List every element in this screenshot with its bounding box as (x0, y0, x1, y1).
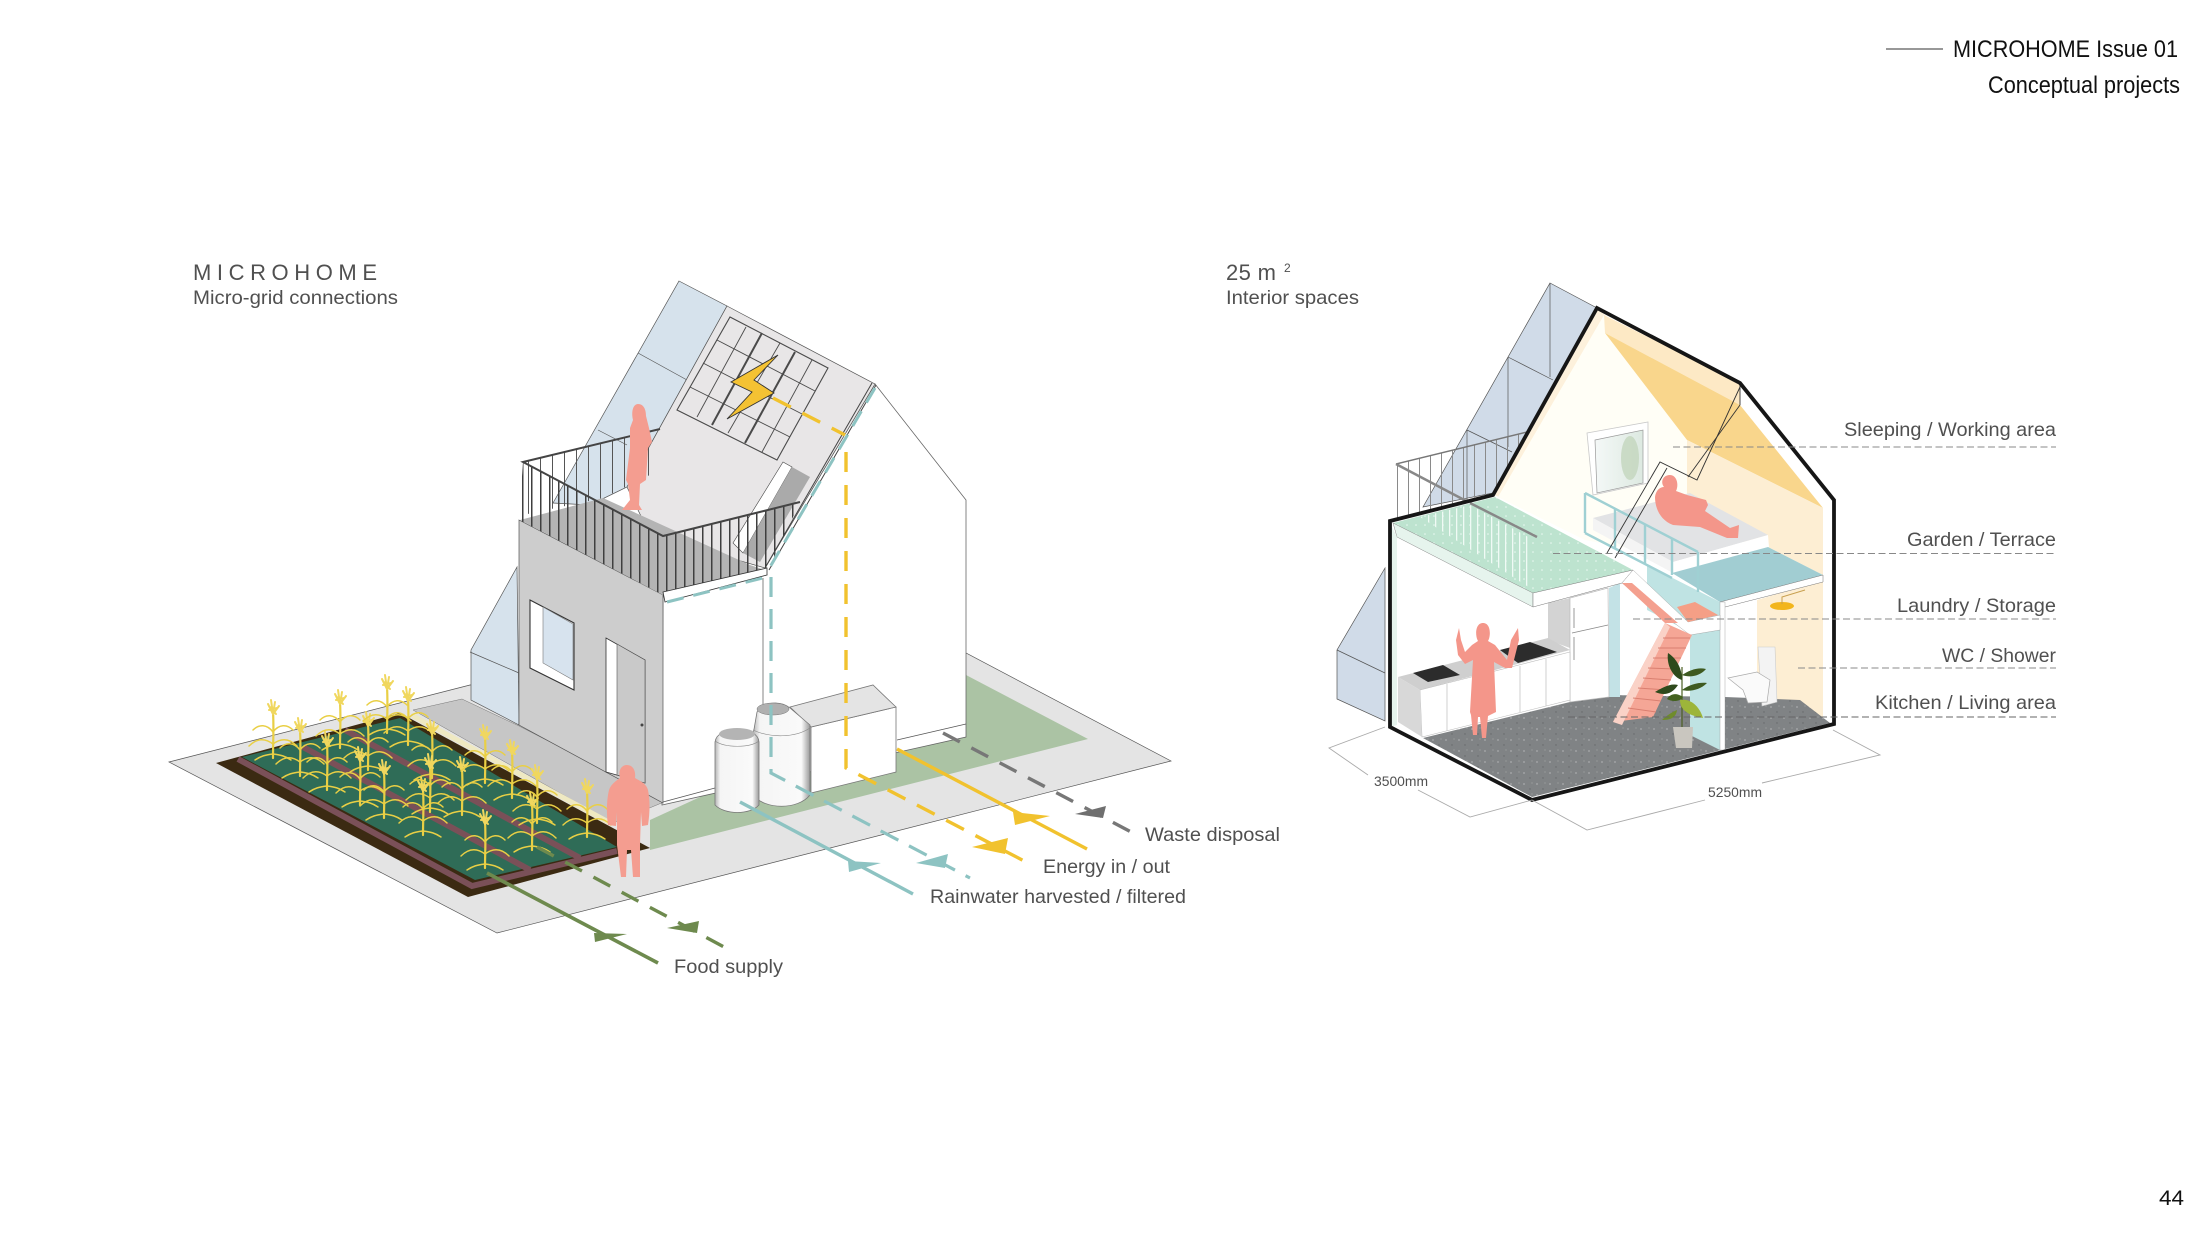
stoves (1413, 642, 1557, 682)
flow: energy in and out (773, 398, 1171, 878)
house gable wall (662, 384, 966, 805)
flow: energy in and out: Energy in / out (1043, 856, 1171, 878)
heading: 25 m2 (1226, 260, 1359, 309)
fridge (1570, 588, 1609, 702)
dimension: 5250mm: 5250mm (1708, 784, 1762, 800)
heading: 25 m2: 25 m (1226, 260, 1276, 285)
blue wall stripe (1609, 583, 1620, 697)
header: Conceptual projects (1988, 72, 2180, 99)
mezzanine edge (1720, 575, 1823, 607)
blue upper side panels (1423, 283, 1597, 507)
small rainwater tank (715, 728, 759, 812)
flow: food supply (487, 847, 783, 978)
callout: garden and terrace: Garden / Terrace (1907, 529, 2056, 551)
green strip (650, 675, 1088, 850)
kitchen counter (1398, 638, 1570, 737)
callout: kitchen and living area: Kitchen / Living area (1875, 692, 2056, 714)
icon: shower head (1770, 590, 1805, 610)
header (1886, 36, 2180, 99)
laundry platform (1677, 602, 1718, 622)
back wall (1498, 315, 1690, 560)
bed (1593, 493, 1769, 573)
ladder (1613, 583, 1692, 725)
page number: 44 (2159, 1187, 2184, 1210)
glass thin lines (1607, 383, 1740, 558)
dimension: 3500mm (1329, 727, 1532, 817)
garden beds (238, 716, 617, 886)
blue upper solar panel (553, 281, 727, 505)
flow: food supply: Food supply (674, 956, 783, 978)
terrace floor (520, 498, 765, 595)
front wall (519, 520, 663, 803)
kitchen grey wall (1548, 598, 1570, 648)
solar panel (677, 317, 828, 460)
floor (1423, 695, 1830, 797)
callout: sleeping and working area: Sleeping / Working area (1844, 419, 2056, 441)
corn plants (249, 675, 611, 870)
roof (627, 306, 875, 568)
wall: warm yellow upper (1687, 440, 1823, 575)
sloped roof: deep yellow (1605, 333, 1823, 508)
blue mezzanine floor (1672, 547, 1823, 602)
header: MICROHOME Issue 01 (1953, 36, 2178, 63)
stair slab (1622, 570, 1720, 635)
dimension: 3500mm: 3500mm (1374, 773, 1428, 789)
blue lower side panel (1337, 568, 1385, 721)
skylight (733, 462, 810, 562)
heading: 25 m2: 2 (1284, 261, 1291, 275)
flow: rainwater harvested and filtered: Rainwater harvested / filtered (930, 886, 1186, 908)
heading: microhome (193, 260, 398, 309)
roof edge strip (765, 383, 876, 570)
dimension: 5250mm (1532, 730, 1880, 830)
sloped roof: light yellow (1604, 315, 1740, 405)
heading: microhome: MICROHOME (193, 260, 377, 285)
concrete path (413, 699, 664, 823)
door (606, 638, 645, 783)
storage blue partition (1647, 565, 1720, 750)
ground plate (169, 653, 1171, 933)
cream gable edge (1493, 308, 1606, 497)
bathroom wall and shower (1725, 580, 1823, 725)
window (530, 600, 574, 690)
flow: waste disposal: Waste disposal (1145, 824, 1280, 846)
black house outline (1390, 308, 1834, 800)
house interior base (1390, 308, 1834, 800)
heading: microhome: Micro-grid connections (193, 287, 398, 309)
panel: interior spaces (1226, 260, 2057, 830)
callout: wc and shower: WC / Shower (1942, 645, 2057, 667)
figure: man in garden (607, 765, 650, 877)
figure: woman on terrace (622, 404, 652, 510)
panel: micro-grid connections (169, 260, 1280, 978)
blue lower solar panel (470, 567, 519, 725)
rainwater storage box (790, 685, 896, 793)
green terrace (1393, 497, 1633, 607)
plant (1655, 653, 1707, 748)
garden bed soil (216, 713, 650, 897)
pale left wall edge (1390, 523, 1397, 727)
icon: lightning bolt (727, 355, 778, 419)
heading: 25 m2: Interior spaces (1226, 287, 1359, 309)
window (1587, 422, 1648, 495)
big rainwater tank (753, 703, 810, 806)
flow: waste disposal (943, 733, 1280, 846)
glass balustrade (1585, 493, 1698, 592)
terrace railing (519, 429, 800, 602)
flow: rainwater harvested and filtered (667, 388, 1186, 908)
figure: woman in kitchen (1456, 623, 1519, 738)
slab under terrace (1533, 570, 1633, 607)
white post (1720, 602, 1725, 750)
callout: laundry and storage: Laundry / Storage (1897, 595, 2056, 617)
wall plinth and pipe (663, 578, 966, 802)
figure: person on bed (1655, 475, 1739, 538)
toilet (1728, 647, 1777, 706)
terrace railing (1396, 432, 1527, 520)
